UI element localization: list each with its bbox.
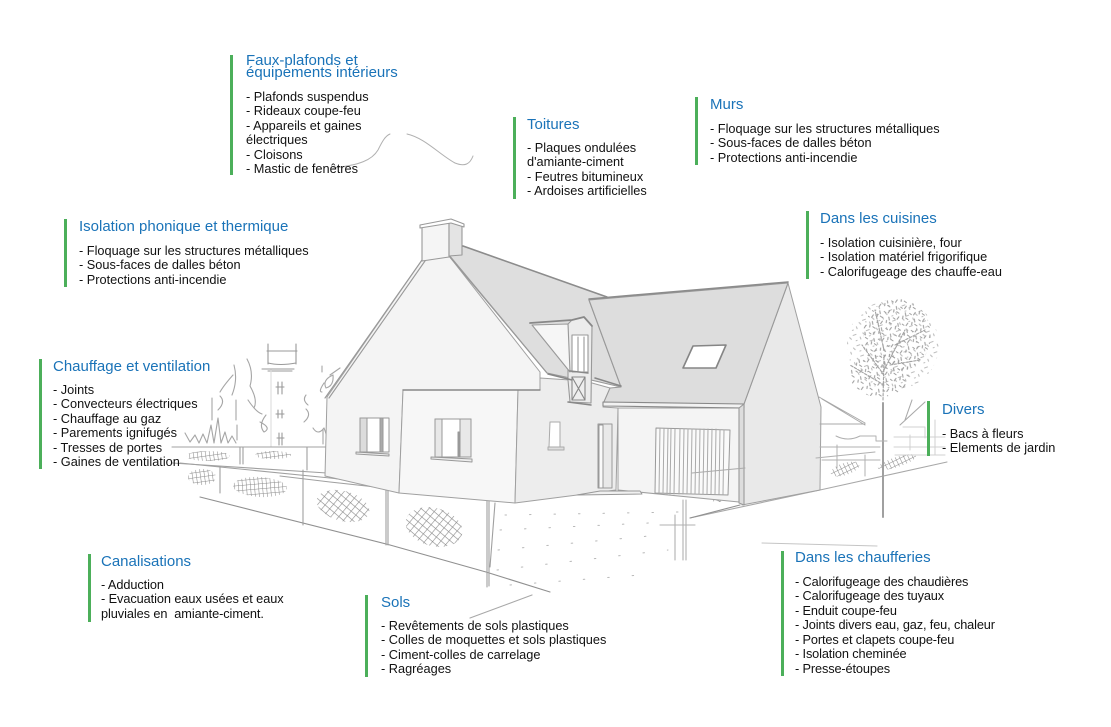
list: Faux-plafonds: - Mastic de fenêtres xyxy=(246,161,358,176)
shed and right fence xyxy=(816,397,945,476)
block: Divers xyxy=(927,400,1055,456)
block: Faux-plafonds xyxy=(230,52,398,176)
list: Canalisations: - Adduction xyxy=(101,576,164,592)
list: Dans les cuisines xyxy=(820,234,1002,279)
list: Toitures: d'amiante-ciment xyxy=(527,154,624,169)
list: Dans les cuisines: - Calorifugeage des chauffe-eau xyxy=(820,264,1002,279)
list: Canalisations xyxy=(101,576,284,621)
list: Chauffage xyxy=(53,382,198,469)
list: Canalisations: pluviales en amiante-ciment. xyxy=(101,606,264,621)
list: Dans les chaufferies: - Isolation cheminée xyxy=(795,646,907,661)
list: Toitures xyxy=(527,140,647,198)
block: Toitures xyxy=(513,116,647,199)
front door xyxy=(577,424,642,495)
list: Chauffage: - Gaines de ventilation xyxy=(53,454,180,469)
house walls xyxy=(325,256,821,505)
list: Divers xyxy=(942,426,1055,455)
list: Dans les cuisines: - Isolation matériel frigorifique xyxy=(820,249,987,264)
block: Canalisations xyxy=(88,552,284,622)
hatched bushes xyxy=(186,451,918,553)
list: Sols: - Ragréages xyxy=(381,661,451,676)
list: Chauffage: - Joints xyxy=(53,382,94,396)
small window xyxy=(548,422,564,450)
fence xyxy=(172,447,947,618)
heading: Canalisations: Canalisations xyxy=(101,552,191,570)
garage door xyxy=(655,428,745,495)
heading: Chauffage: Chauffage et ventilation xyxy=(53,358,210,374)
list: Isolation: - Floquage sur les structures métalliques xyxy=(79,242,309,258)
list: Canalisations: - Evacuation eaux usées et eaux xyxy=(101,591,284,606)
list: Toitures: - Plaques ondulées xyxy=(527,140,636,154)
list: Dans les chaufferies: - Calorifugeage des tuyaux xyxy=(795,588,944,603)
list: Faux-plafonds: - Appareils et gaines xyxy=(246,118,362,133)
heading: Dans les chaufferies: Dans les chaufferies xyxy=(795,549,931,566)
left window xyxy=(356,418,389,456)
list: Toitures: - Ardoises artificielles xyxy=(527,183,647,198)
skylight xyxy=(683,345,726,368)
block: Sols xyxy=(365,594,606,677)
list: Faux-plafonds xyxy=(246,88,369,176)
list: Chauffage: - Convecteurs électriques xyxy=(53,396,198,411)
list: Chauffage: - Chauffage au gaz xyxy=(53,411,161,426)
list: Divers: - Elements de jardin xyxy=(942,440,1055,455)
block: Dans les cuisines xyxy=(806,210,1002,279)
list: Toitures: - Feutres bitumineux xyxy=(527,169,643,184)
list: Sols: - Revêtements de sols plastiques xyxy=(381,618,569,632)
list: Dans les chaufferies: - Calorifugeage des chaudières xyxy=(795,574,968,588)
list: Murs xyxy=(710,120,940,165)
list: Chauffage: - Tresses de portes xyxy=(53,440,162,455)
list: Dans les chaufferies: - Joints divers eau, gaz, feu, chaleur xyxy=(795,617,995,632)
chimney xyxy=(420,219,464,261)
list: Faux-plafonds: électriques xyxy=(246,132,308,147)
decorative swirl xyxy=(333,134,473,168)
heading: Faux-plafonds: équipements intérieurs xyxy=(246,64,398,81)
block: Isolation phonique et thermique xyxy=(64,218,309,287)
heading: Faux-plafonds xyxy=(246,52,398,81)
list: Dans les chaufferies: - Presse-étoupes xyxy=(795,661,890,676)
block: Dans les chaufferies xyxy=(781,549,995,676)
list: Isolation: - Sous-faces de dalles béton xyxy=(79,257,241,272)
tree xyxy=(847,299,939,517)
list: Murs: - Floquage sur les structures métalliques xyxy=(710,120,940,136)
heading: Faux-plafonds: Faux-plafonds et xyxy=(246,52,358,69)
list: Dans les chaufferies: - Portes et clapets coupe-feu xyxy=(795,632,954,647)
dormer xyxy=(530,317,621,405)
list: Chauffage: - Parements ignifugés xyxy=(53,425,177,440)
heading: Dans les cuisines: Dans les cuisines xyxy=(820,210,937,226)
heading: Divers: Divers xyxy=(942,400,985,418)
list: Dans les chaufferies xyxy=(795,574,995,676)
left building and bushes xyxy=(185,344,340,447)
list: Isolation xyxy=(79,242,309,287)
heading: Murs: Murs xyxy=(710,96,743,112)
list: Dans les chaufferies: - Enduit coupe-feu xyxy=(795,603,897,618)
list: Murs: - Protections anti-incendie xyxy=(710,150,857,165)
list: Dans les cuisines: - Isolation cuisinière, four xyxy=(820,234,962,250)
block: Murs xyxy=(695,96,940,165)
list: Sols: - Colles de moquettes et sols plastiques xyxy=(381,632,606,647)
middle window xyxy=(431,419,472,462)
roofs xyxy=(325,246,788,505)
block: Chauffage et ventilation xyxy=(39,358,210,469)
list: Sols: - Ciment-colles de carrelage xyxy=(381,647,540,662)
list: Faux-plafonds: - Cloisons xyxy=(246,147,303,162)
heading: Isolation: Isolation phonique et thermique xyxy=(79,218,288,234)
list: Murs: - Sous-faces de dalles béton xyxy=(710,135,872,150)
heading: Toitures: Toitures xyxy=(527,116,580,132)
list: Faux-plafonds: - Rideaux coupe-feu xyxy=(246,103,361,118)
list: Faux-plafonds: - Plafonds suspendus xyxy=(246,88,369,104)
heading: Sols: Sols xyxy=(381,594,410,610)
list: Divers: - Bacs à fleurs xyxy=(942,426,1024,440)
speckled ground xyxy=(497,512,680,585)
list: Isolation: - Protections anti-incendie xyxy=(79,272,226,287)
list: Sols xyxy=(381,618,606,676)
